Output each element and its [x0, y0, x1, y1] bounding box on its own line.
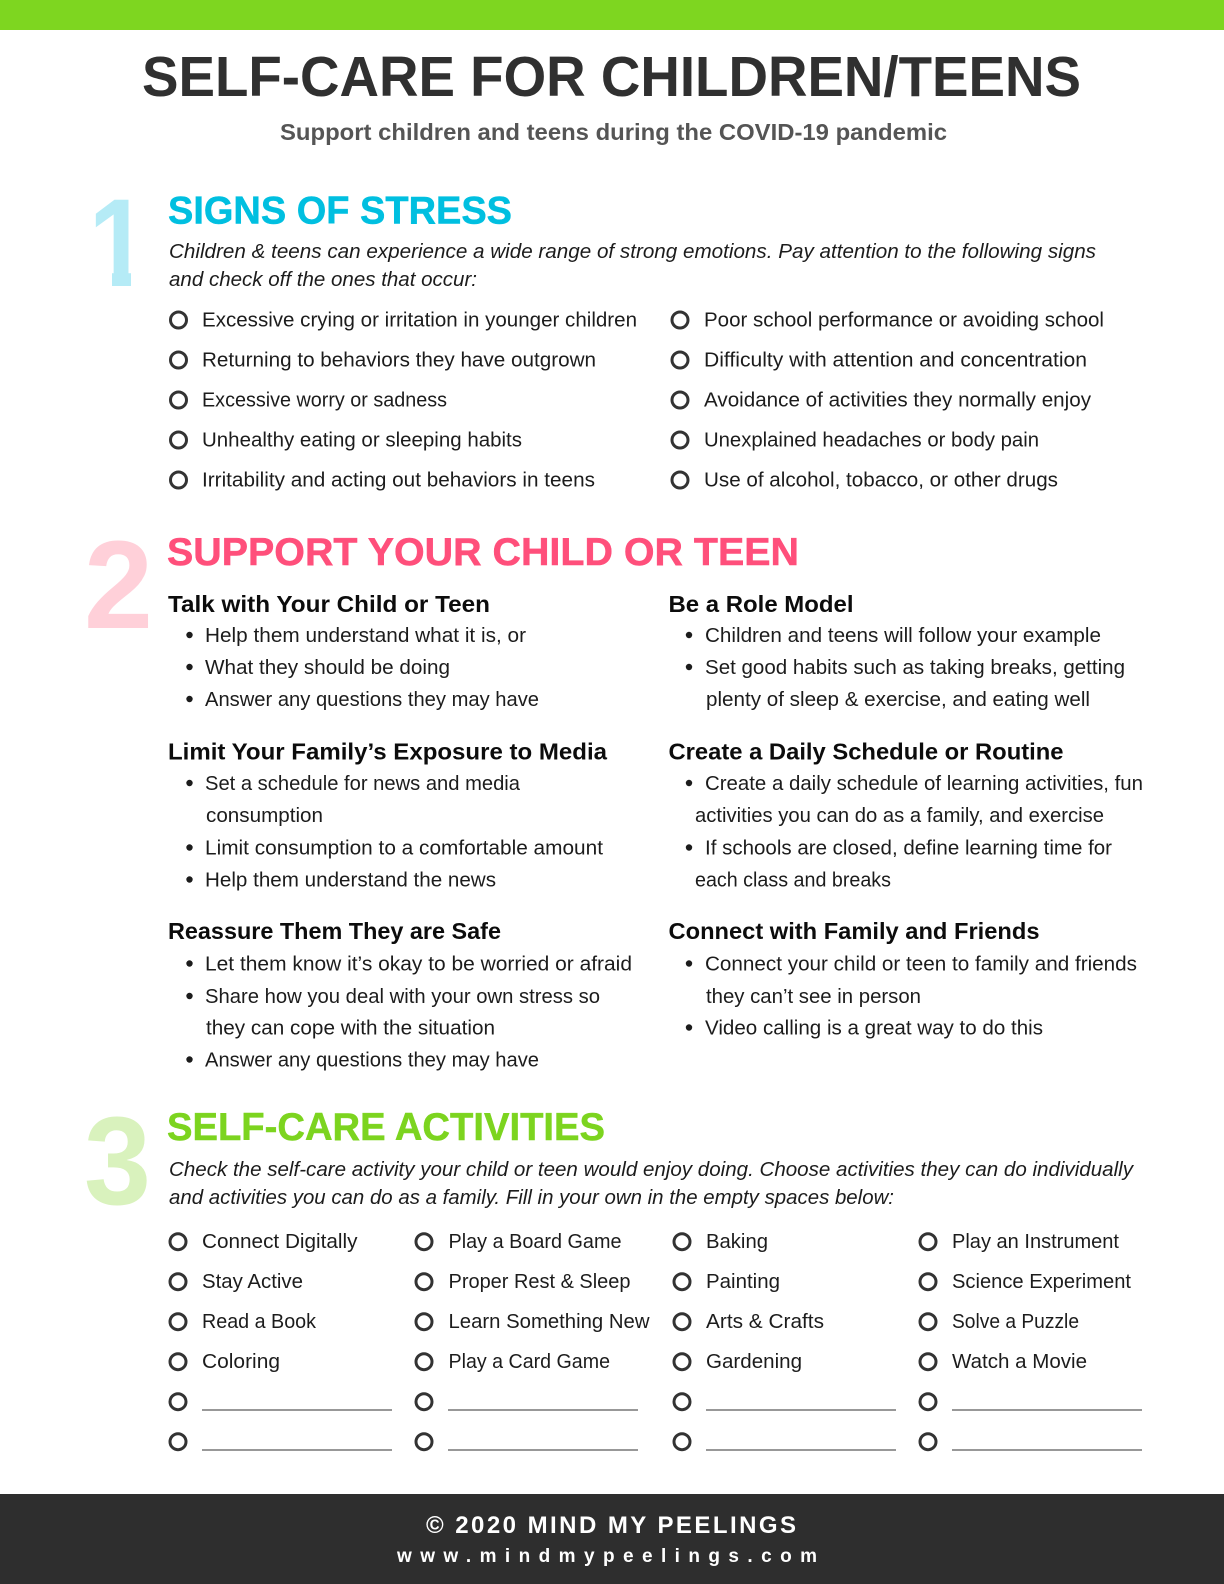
intro text: [169, 241, 1096, 291]
checklist: activities column 3: Painting: [706, 1270, 780, 1293]
block: reassure them: [168, 918, 632, 1072]
title: SELF-CARE FOR CHILDREN/TEENS: [142, 45, 1081, 109]
checklist: activities column 2: Learn Something New: [448, 1310, 650, 1333]
block: reassure them: Answer any questions they may have: [205, 1048, 539, 1072]
block: be a role model: Set good habits such as taking breaks, getting: [705, 656, 1125, 679]
heading: support your child or teen: SUPPORT YOUR CHILD OR TEEN: [167, 531, 799, 574]
block: be a role model: Children and teens will follow your example: [705, 624, 1101, 647]
checklist: activities column 3: Gardening: [706, 1350, 802, 1373]
checklist: activities column 1: [170, 1230, 392, 1450]
checklist: signs left column: Returning to behaviors they have outgrown: [202, 348, 596, 372]
panel: self-care activities: [84, 1092, 1142, 1450]
block: reassure them: Reassure Them They are Safe: [168, 918, 501, 944]
checklist: activities column 4: [920, 1230, 1142, 1450]
block: daily schedule: activities you can do as a family, and exercise: [695, 804, 1104, 827]
checklist: activities column 3: Baking: [706, 1230, 768, 1253]
panel: signs of stress: [88, 174, 1104, 492]
block: daily schedule: Create a Daily Schedule or Routine: [668, 738, 1064, 764]
footer: [0, 1494, 1224, 1584]
checklist: signs right column: Use of alcohol, tobacco, or other drugs: [704, 468, 1058, 492]
intro text: and check off the ones that occur:: [169, 269, 477, 291]
block: be a role model: Be a Role Model: [668, 591, 854, 617]
checklist: signs left column: [170, 308, 637, 492]
checklist: signs right column: Avoidance of activities they normally enjoy: [704, 388, 1092, 412]
block: reassure them: they can cope with the situation: [206, 1016, 495, 1040]
checklist: activities column 1: Coloring: [202, 1350, 280, 1373]
checklist: activities column 3: Arts & Crafts: [706, 1310, 824, 1333]
checklist: signs left column: Excessive worry or sadness: [202, 388, 447, 412]
checklist: signs left column: Irritability and acting out behaviors in teens: [202, 468, 595, 492]
footer website: www.mindmypeelings.com: [396, 1546, 817, 1567]
section number 1: 1: [88, 174, 148, 313]
checklist: signs left column: Unhealthy eating or sleeping habits: [202, 428, 522, 452]
block: daily schedule: each class and breaks: [695, 868, 891, 892]
block: talk with your child: Help them understand what it is, or: [205, 624, 526, 647]
checklist: activities column 2: [416, 1230, 650, 1450]
checklist: activities column 1: Connect Digitally: [202, 1230, 358, 1253]
block: talk with your child: What they should be doing: [205, 656, 450, 679]
block: talk with your child: [168, 591, 539, 711]
block: connect with family: they can’t see in person: [706, 985, 921, 1008]
checklist: activities column 2: Play a Board Game: [448, 1230, 622, 1253]
block: connect with family: Video calling is a great way to do this: [705, 1016, 1043, 1040]
block: limit media exposure: Set a schedule for news and media: [205, 772, 521, 795]
footer copyright: © 2020 MIND MY PEELINGS: [426, 1512, 796, 1539]
heading: self-care activities: SELF-CARE ACTIVITIES: [167, 1106, 605, 1149]
block: reassure them: Let them know it’s okay to be worried or afraid: [205, 952, 632, 976]
panel: support your child or teen: [84, 516, 1143, 1072]
checklist: signs right column: Unexplained headaches or body pain: [704, 428, 1039, 452]
intro text: Check the self-care activity your child or teen would enjoy doing. Choose activities they can do individually: [169, 1159, 1134, 1181]
intro text: [169, 1159, 1134, 1209]
checklist: activities column 4: Solve a Puzzle: [952, 1310, 1079, 1333]
block: limit media exposure: Limit Your Family’s Exposure to Media: [168, 738, 607, 764]
block: be a role model: [668, 591, 1125, 711]
block: daily schedule: [668, 738, 1143, 892]
block: connect with family: Connect with Family and Friends: [668, 918, 1040, 944]
checklist: activities column 4: Science Experiment: [952, 1270, 1131, 1293]
checklist: signs right column: [672, 308, 1104, 492]
block: talk with your child: Talk with Your Child or Teen: [168, 591, 490, 617]
block: daily schedule: Create a daily schedule of learning activities, fun: [705, 772, 1143, 795]
intro text: and activities you can do as a family. Fill in your own in the empty spaces below:: [169, 1187, 894, 1209]
block: reassure them: Share how you deal with your own stress so: [205, 985, 600, 1008]
heading: signs of stress: SIGNS OF STRESS: [168, 190, 512, 232]
block: be a role model: plenty of sleep & exercise, and eating well: [706, 688, 1090, 711]
block: connect with family: Connect your child or teen to family and friends: [705, 952, 1137, 976]
checklist: signs right column: Difficulty with attention and concentration: [704, 348, 1087, 372]
checklist: activities column 3: [674, 1230, 896, 1450]
checklist: activities column 1: Read a Book: [202, 1310, 317, 1333]
section number 3: 3: [84, 1092, 151, 1231]
block: connect with family: [668, 918, 1137, 1040]
block: limit media exposure: [168, 738, 607, 892]
block: talk with your child: Answer any questions they may have: [205, 688, 539, 711]
checklist: activities column 2: Proper Rest & Sleep: [448, 1270, 630, 1293]
section number 2: 2: [84, 516, 153, 655]
block: limit media exposure: Help them understand the news: [205, 868, 496, 892]
checklist: activities column 4: Watch a Movie: [952, 1350, 1087, 1373]
checklist: activities column 4: Play an Instrument: [952, 1230, 1119, 1253]
block: daily schedule: If schools are closed, define learning time for: [705, 836, 1112, 860]
top green bar: [0, 0, 1224, 30]
checklist: signs right column: Poor school performance or avoiding school: [704, 308, 1104, 332]
block: limit media exposure: Limit consumption to a comfortable amount: [205, 836, 603, 860]
intro text: Children & teens can experience a wide range of strong emotions. Pay attention to the following signs: [169, 241, 1096, 263]
checklist: signs left column: Excessive crying or irritation in younger children: [202, 308, 637, 332]
block: limit media exposure: consumption: [206, 804, 323, 827]
checklist: activities column 1: Stay Active: [202, 1270, 303, 1293]
checklist: activities column 2: Play a Card Game: [448, 1350, 610, 1373]
subtitle: Support children and teens during the COVID-19 pandemic: [280, 119, 947, 145]
